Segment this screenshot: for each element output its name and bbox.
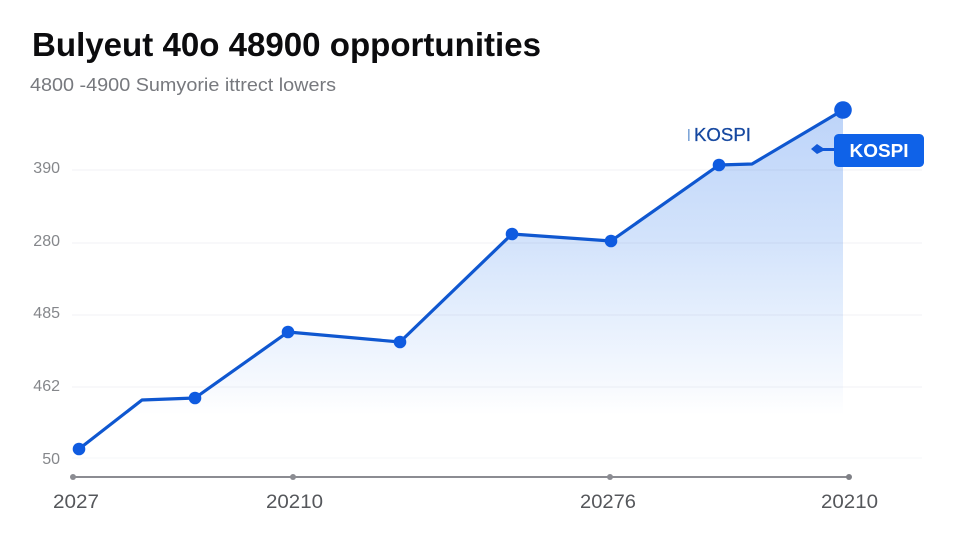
y-axis labels: 462 [33,378,60,395]
y-axis labels: 390 [33,160,60,177]
title: Bulyeut 40o 48900 opportunities [32,27,541,64]
data points [73,101,852,455]
y-axis labels: 485 [33,305,60,322]
y-axis labels: 280 [33,233,60,250]
y-axis labels: 50 [42,451,60,468]
x-axis labels: 2027 [53,491,99,513]
chart: KOSPI line chart [33,101,922,513]
x axis [70,474,852,480]
series label: KOSPI [694,125,751,145]
callout [811,134,924,167]
x-axis labels: 20276 [580,491,636,513]
shaded area under line [79,110,843,449]
x-axis labels: 20210 [821,491,878,513]
data line [79,110,843,449]
y-axis labels [33,160,60,468]
subtitle: 4800 -4900 Sumyorie ittrect lowers [30,75,336,95]
x-axis labels: 20210 [266,491,323,513]
callout: KOSPI [850,141,908,161]
x-axis labels [53,491,878,513]
